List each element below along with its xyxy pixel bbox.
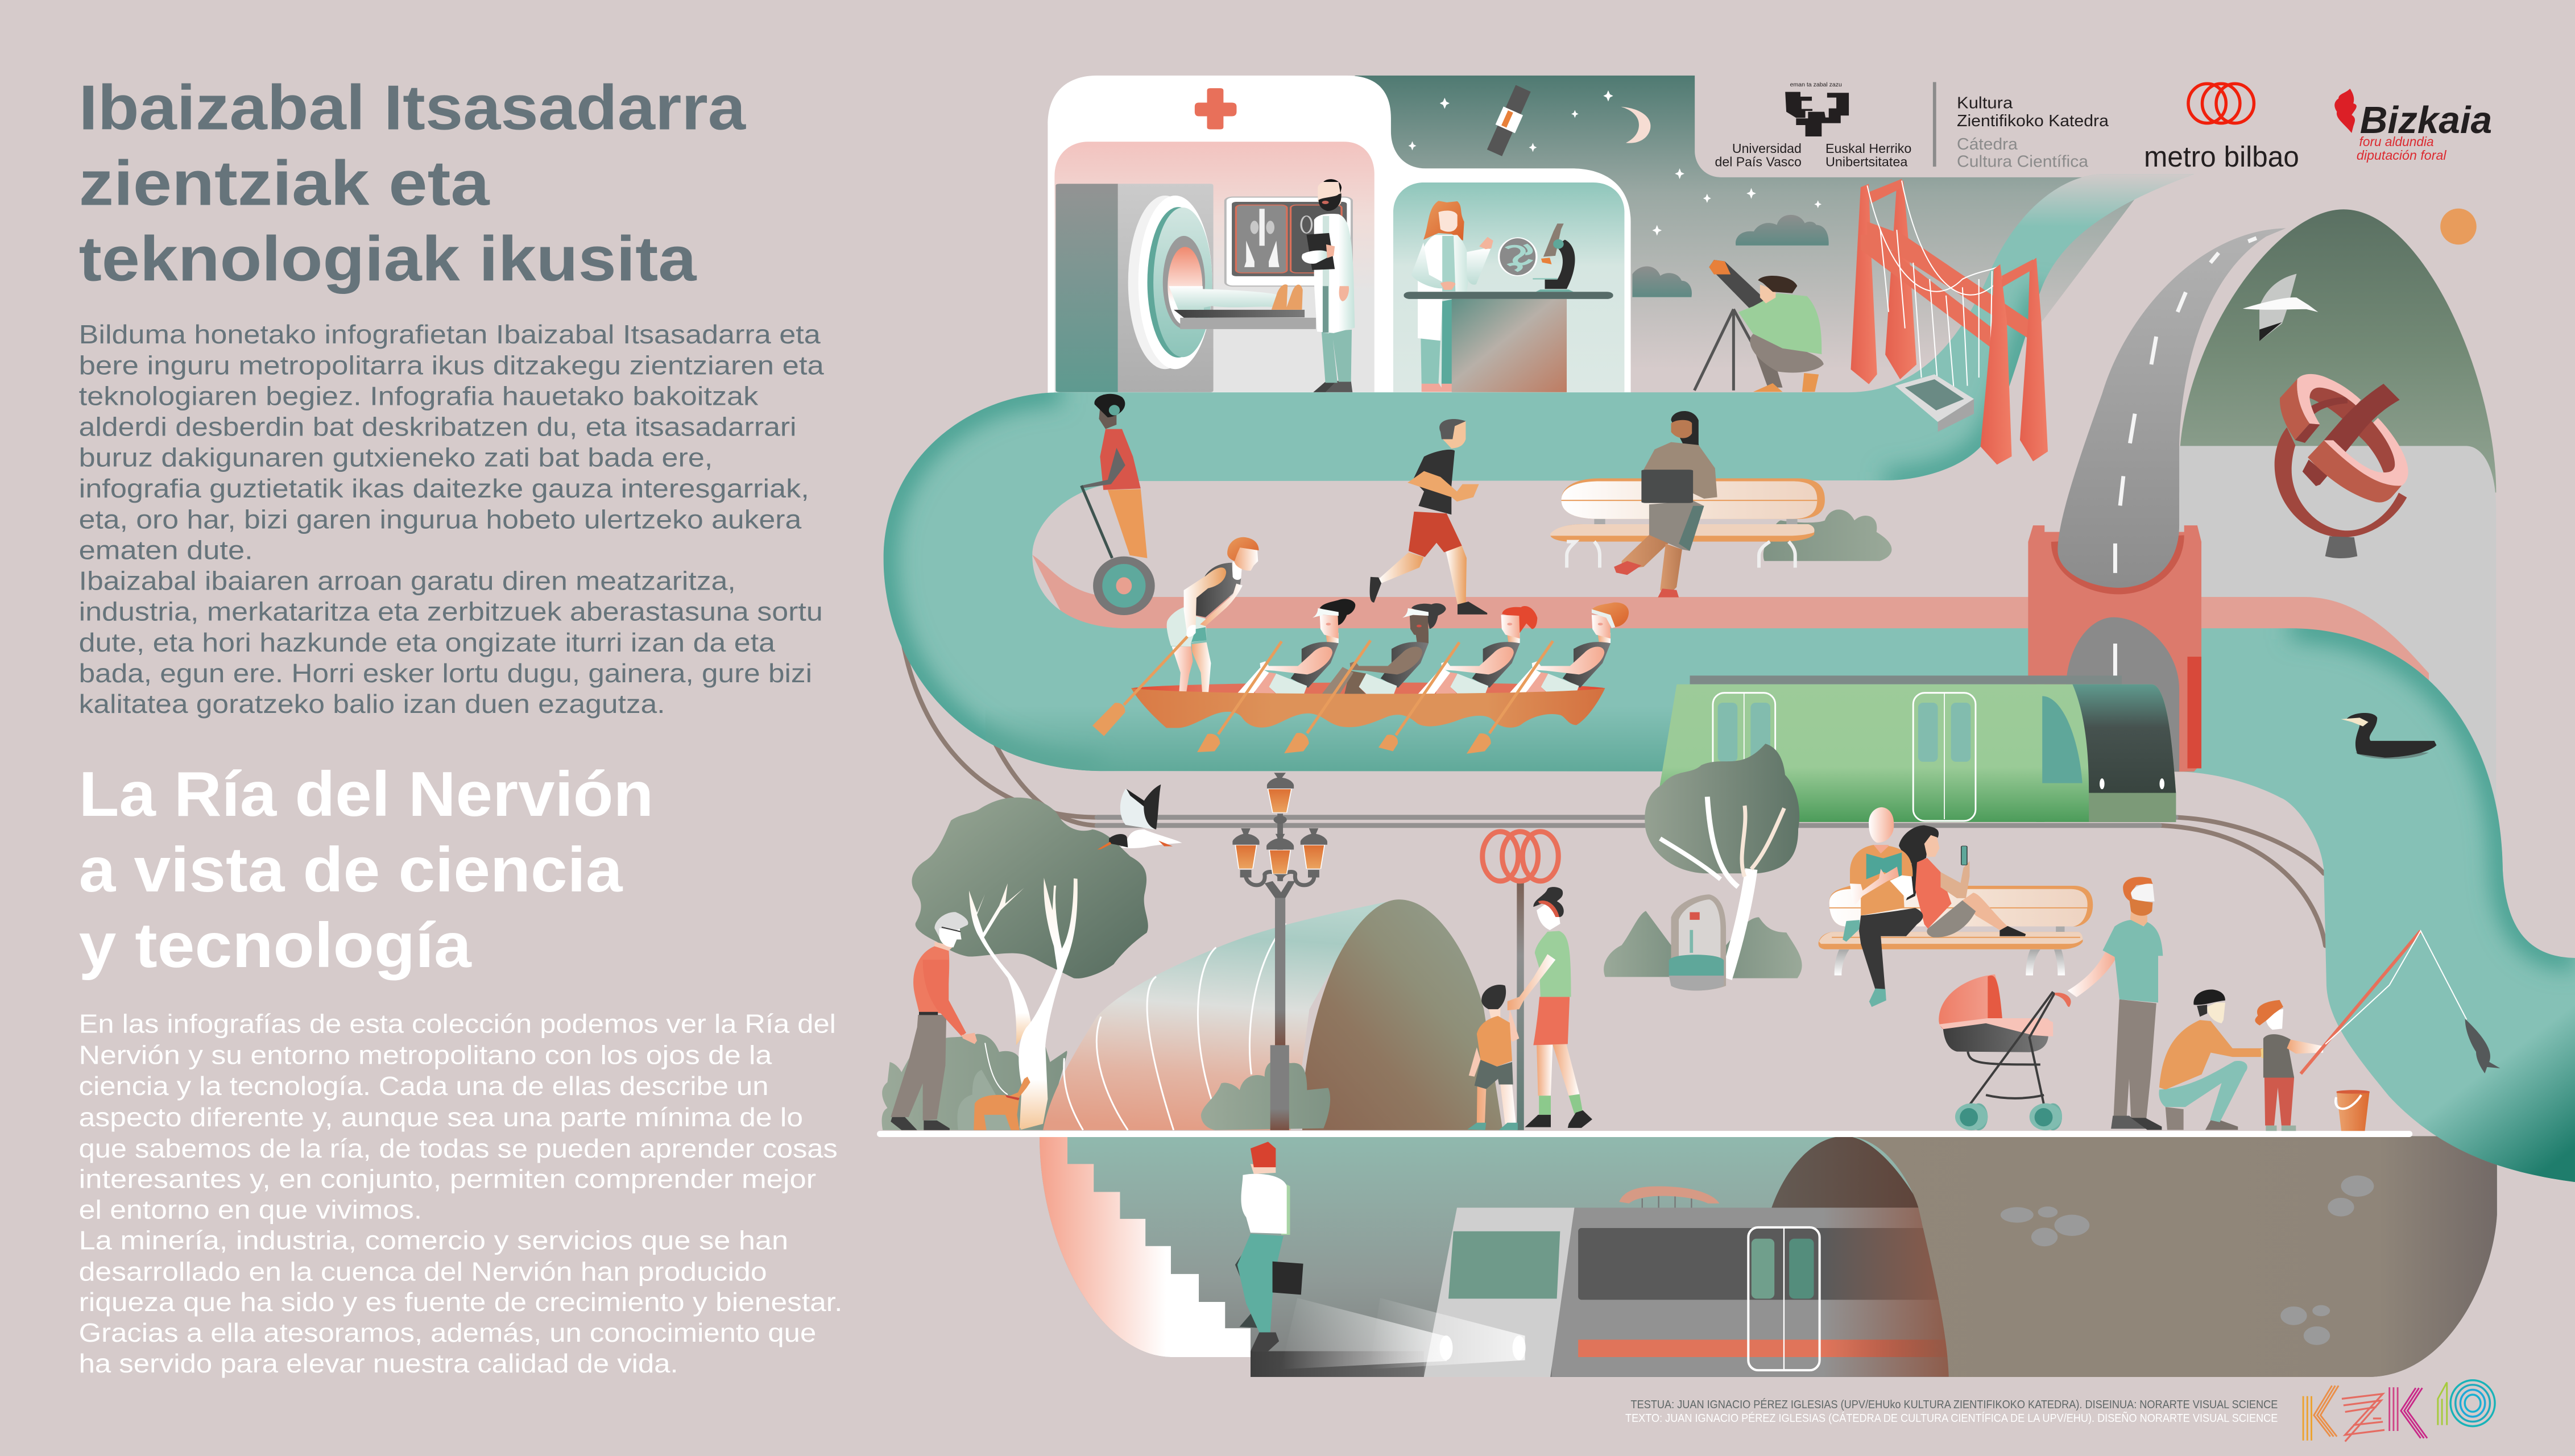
woman with phone <box>1899 826 2026 938</box>
astronomer with telescope <box>1694 260 1824 392</box>
salmon path <box>1032 555 2429 723</box>
rower 4 <box>1508 603 1629 695</box>
seagull <box>2243 274 2318 341</box>
rower 2 <box>1321 603 1446 695</box>
bush <box>882 1034 1067 1130</box>
Kultura Zientifikoko Katedra logo: Zientifikoko Katedra <box>1957 112 2109 130</box>
foliage <box>912 798 1148 978</box>
dome ribs <box>1064 923 1286 1130</box>
text block: Spanish intro: interesantes y, en conjunto, permiten comprender mejor <box>79 1164 816 1194</box>
UPV/EHU logo: eman ta zabal zazu <box>1790 82 1842 88</box>
rear tower <box>1850 181 1916 384</box>
cormorant <box>2341 713 2436 759</box>
woman <box>1508 887 1592 1128</box>
boy and woman <box>1467 887 1592 1130</box>
metro sign <box>1483 832 1558 1130</box>
canopy entrance <box>1619 1187 1719 1208</box>
satellite icon <box>1485 84 1533 157</box>
segway wheel <box>1093 557 1155 615</box>
door <box>1913 693 1976 821</box>
bush behind bench <box>1763 509 1891 561</box>
river <box>871 164 2575 1198</box>
runner <box>1370 419 1487 615</box>
UPV/EHU logo: Universidad <box>1732 141 1802 156</box>
microscope <box>1533 223 1575 292</box>
red cross icon <box>1195 88 1236 130</box>
Bizkaia logo: foru aldundia <box>2359 134 2434 149</box>
dome glass <box>1043 901 1389 1130</box>
text block: Spanish intro: Nervión y su entorno metropolitano con los ojos de la <box>79 1040 772 1069</box>
dome arch <box>1302 899 1502 1130</box>
standing rower <box>1167 537 1259 694</box>
orange bucket <box>2336 1090 2370 1131</box>
right tree and fountain <box>1604 744 1802 990</box>
Bizkaia logo: Bizkaia <box>2360 99 2492 142</box>
bench back <box>1829 886 2093 927</box>
dog <box>974 1077 1030 1130</box>
road <box>2051 228 2286 771</box>
text block: Basque intro: bada, egun ere. Horri esker lortu dugu, gainera, gure bizi <box>79 658 812 688</box>
door <box>1713 693 1775 821</box>
park bench <box>1550 478 1891 568</box>
UPV/EHU logo: Unibertsitatea <box>1825 155 1908 169</box>
dome structure <box>1043 899 1502 1130</box>
title: Basque: zientziak eta <box>79 147 490 218</box>
text block: Basque intro: Bilduma honetako infografietan Ibaizabal Itsasadarra eta <box>79 320 821 349</box>
scientist <box>1411 201 1493 392</box>
text block: Spanish intro: Gracias a ella atesoramos, además, un conocimiento que <box>79 1318 816 1347</box>
front bush lump <box>957 1070 1022 1130</box>
bench seat <box>1819 932 2083 949</box>
title: Spanish <box>79 758 653 981</box>
tall bearded man <box>2068 877 2163 1130</box>
title: Spanish: a vista de ciencia <box>79 834 623 905</box>
orange sun <box>2440 209 2477 244</box>
rower 1 <box>1236 599 1355 695</box>
trunks <box>969 883 1031 1045</box>
text block: Basque intro: dute, eta hori hazkunde eta ongizate iturri izan da eta <box>79 628 775 657</box>
credits: TEXTO: JUAN IGNACIO PÉREZ IGLESIAS (CÁTEDRA DE CULTURA CIENTÍFICA DE LA UPV/EHU). DISEÑO NORARTE VISUAL SCIENCE <box>1625 1411 2278 1425</box>
transporter gondola <box>1895 374 1974 432</box>
centre lantern <box>1266 834 1294 874</box>
metro bilbao logo: metro bilbao <box>2144 140 2299 173</box>
text block: Spanish intro: ha servido para elevar nuestra calidad de vida. <box>79 1349 678 1378</box>
tower crossbar and deck <box>1861 179 2036 355</box>
underground shell <box>1040 1136 2497 1377</box>
logo strip <box>1715 82 2492 173</box>
right lantern <box>1301 828 1327 877</box>
rowing boat with crew <box>1092 537 1629 754</box>
tracks <box>903 638 2325 945</box>
segway rider <box>1082 394 1155 615</box>
hospital interior <box>1054 142 1624 392</box>
sculpture <box>2275 374 2408 558</box>
text block: Spanish intro <box>79 1009 842 1378</box>
man with book <box>1843 807 1923 1007</box>
text block: Spanish intro: que sabemos de la ría, de todas se pueden aprender cosas <box>79 1134 838 1163</box>
text block: Basque intro: Ibaizabal ibaiaren arroan garatu diren meatzaritza, <box>79 566 736 596</box>
night sky panel <box>1355 76 2151 394</box>
credits <box>1625 1398 2278 1425</box>
pram wheels <box>1955 1104 2062 1130</box>
elderly man with dog <box>891 912 1030 1130</box>
Kultura Zientifikoko Katedra logo: Cátedra <box>1957 135 2018 154</box>
oars <box>1092 637 1553 754</box>
text block: Basque intro <box>79 320 824 719</box>
headlight beams <box>1281 1298 1525 1369</box>
lower bench with couple <box>1819 807 2093 1007</box>
text block: Spanish intro: En las infografías de esta colección podemos ver la Ría del <box>79 1009 836 1038</box>
white floor <box>877 1131 2412 1137</box>
front tower <box>1981 258 2048 464</box>
title: Spanish: La Ría del Nervión <box>79 758 653 829</box>
UPV/EHU logo: Euskal Herriko <box>1825 141 1911 156</box>
title: Spanish: y tecnología <box>79 910 472 981</box>
pram <box>1939 974 2071 1130</box>
text block: Spanish intro: La minería, industria, comercio y servicios que se han <box>79 1226 788 1255</box>
text block: Basque intro: buruz dakigunaren gutxieneko zati bat bada ere, <box>79 443 713 472</box>
tree trunk <box>1660 797 1784 978</box>
Kultura Zientifikoko Katedra logo <box>1957 94 2109 171</box>
person with laptop <box>1614 411 1717 598</box>
train door <box>1748 1227 1820 1370</box>
oystercatcher bird <box>1097 785 1182 849</box>
credits: TESTUA: JUAN IGNACIO PÉREZ IGLESIAS (UPV/EHUko KULTURA ZIENTIFIKOKO KATEDRA). DISEINUA: NORARTE VISUAL SCIENCE <box>1631 1398 2278 1411</box>
left lantern <box>1232 828 1260 877</box>
boat interior <box>1131 683 1605 694</box>
Kultura Zientifikoko Katedra logo: Cultura Científica <box>1957 152 2089 171</box>
tram nose <box>2034 685 2176 822</box>
doctor <box>1302 179 1355 392</box>
Bizkaia logo: diputación foral <box>2357 148 2446 163</box>
sample globe <box>1499 238 1537 276</box>
leash <box>985 1043 1008 1094</box>
lab table <box>1404 292 1613 392</box>
clouds <box>1632 215 1829 297</box>
green tram <box>1654 675 2176 822</box>
stones <box>2001 1176 2374 1345</box>
text block: Spanish intro: ciencia y la tecnología. Cada una de ellas describe un <box>79 1071 768 1101</box>
KZK10 logo <box>2303 1380 2495 1441</box>
tree foliage <box>1645 744 1799 873</box>
MRI machine <box>1055 184 1214 392</box>
Bizkaia logo <box>2334 89 2492 163</box>
bush at dome <box>1201 1061 1330 1130</box>
text block: Basque intro: kalitatea goratzeko balio izan duen ezagutza. <box>79 689 665 719</box>
x-ray panel <box>1226 197 1352 286</box>
top lantern <box>1267 773 1294 812</box>
left tree <box>882 798 1148 1130</box>
text block: Basque intro: industria, merkataritza eta zerbitzuek aberastasuna sortu <box>79 597 823 627</box>
fish icon <box>2465 1019 2500 1073</box>
scanner room arch <box>1054 142 1375 392</box>
suspension bridge <box>1850 179 2048 464</box>
text block: Spanish intro: el entorno en que vivimos. <box>79 1195 422 1225</box>
commuter <box>1235 1142 1303 1351</box>
text block: Basque intro: ematen dute. <box>79 535 253 565</box>
fishing rod and line <box>2301 931 2466 1074</box>
underground section <box>1040 1136 2512 1387</box>
metro bilbao logo <box>2144 84 2299 173</box>
UPV/EHU logo <box>1715 82 1911 169</box>
stairs <box>1040 1136 1251 1357</box>
bushes <box>1604 911 1671 977</box>
metro train <box>1424 1208 1954 1377</box>
text block: Basque intro: bere inguru metropolitarra ikus ditzakegu zientziaren eta <box>79 350 824 380</box>
rower 3 <box>1418 606 1537 695</box>
runner upper body <box>1407 419 1479 515</box>
crouching man <box>2159 989 2274 1130</box>
platform <box>1251 1351 1424 1377</box>
text block: Basque intro: infografia guztietatik ikas daitezke gauza interesgarriak, <box>79 474 809 503</box>
child fishing <box>2255 1000 2323 1131</box>
street lamp <box>1232 773 1327 1130</box>
lab room arch <box>1393 182 1624 392</box>
text block: Spanish intro: desarrollado en la cuenca del Nervión han producido <box>79 1256 767 1286</box>
man <box>891 912 977 1130</box>
title: Basque: Ibaizabal Itsasadarra <box>79 72 746 143</box>
grey plaza <box>2179 446 2496 837</box>
title: Basque <box>79 72 746 294</box>
hospital white panel <box>1048 76 1631 394</box>
patient table <box>1169 284 1316 329</box>
title: Basque: teknologiak ikusita <box>79 223 697 294</box>
green hill <box>2179 209 2496 492</box>
rock wall <box>1845 1136 2512 1387</box>
cables <box>1867 181 2036 394</box>
text block: Basque intro: eta, oro har, bizi garen ingurua hobeto ulertzeko aukera <box>79 504 802 534</box>
hull <box>1131 688 1605 728</box>
runner legs <box>1370 512 1487 615</box>
text block: Spanish intro: aspecto diferente y, aunque sea una parte mínima de lo <box>79 1102 803 1132</box>
boy <box>1467 985 1519 1130</box>
Kultura Zientifikoko Katedra logo: Kultura <box>1957 94 2013 113</box>
stars <box>1409 90 1821 236</box>
moon icon <box>1621 107 1651 143</box>
tunnel mouth <box>1767 1136 1930 1223</box>
bench legs <box>1835 949 2065 976</box>
drinking fountain <box>1669 894 1726 990</box>
text block: Basque intro: alderdi desberdin bat deskribatzen du, eta itsasadarrari <box>79 412 797 442</box>
headlights <box>1439 1335 1526 1360</box>
stone bridge <box>2028 228 2286 771</box>
text block: Basque intro: teknologiaren begiez. Infografia hauetako bakoitzak <box>79 381 759 410</box>
UPV/EHU logo: del País Vasco <box>1715 155 1802 169</box>
text block: Spanish intro: riqueza que ha sido y es fuente de crecimiento y bienestar. <box>79 1287 842 1317</box>
